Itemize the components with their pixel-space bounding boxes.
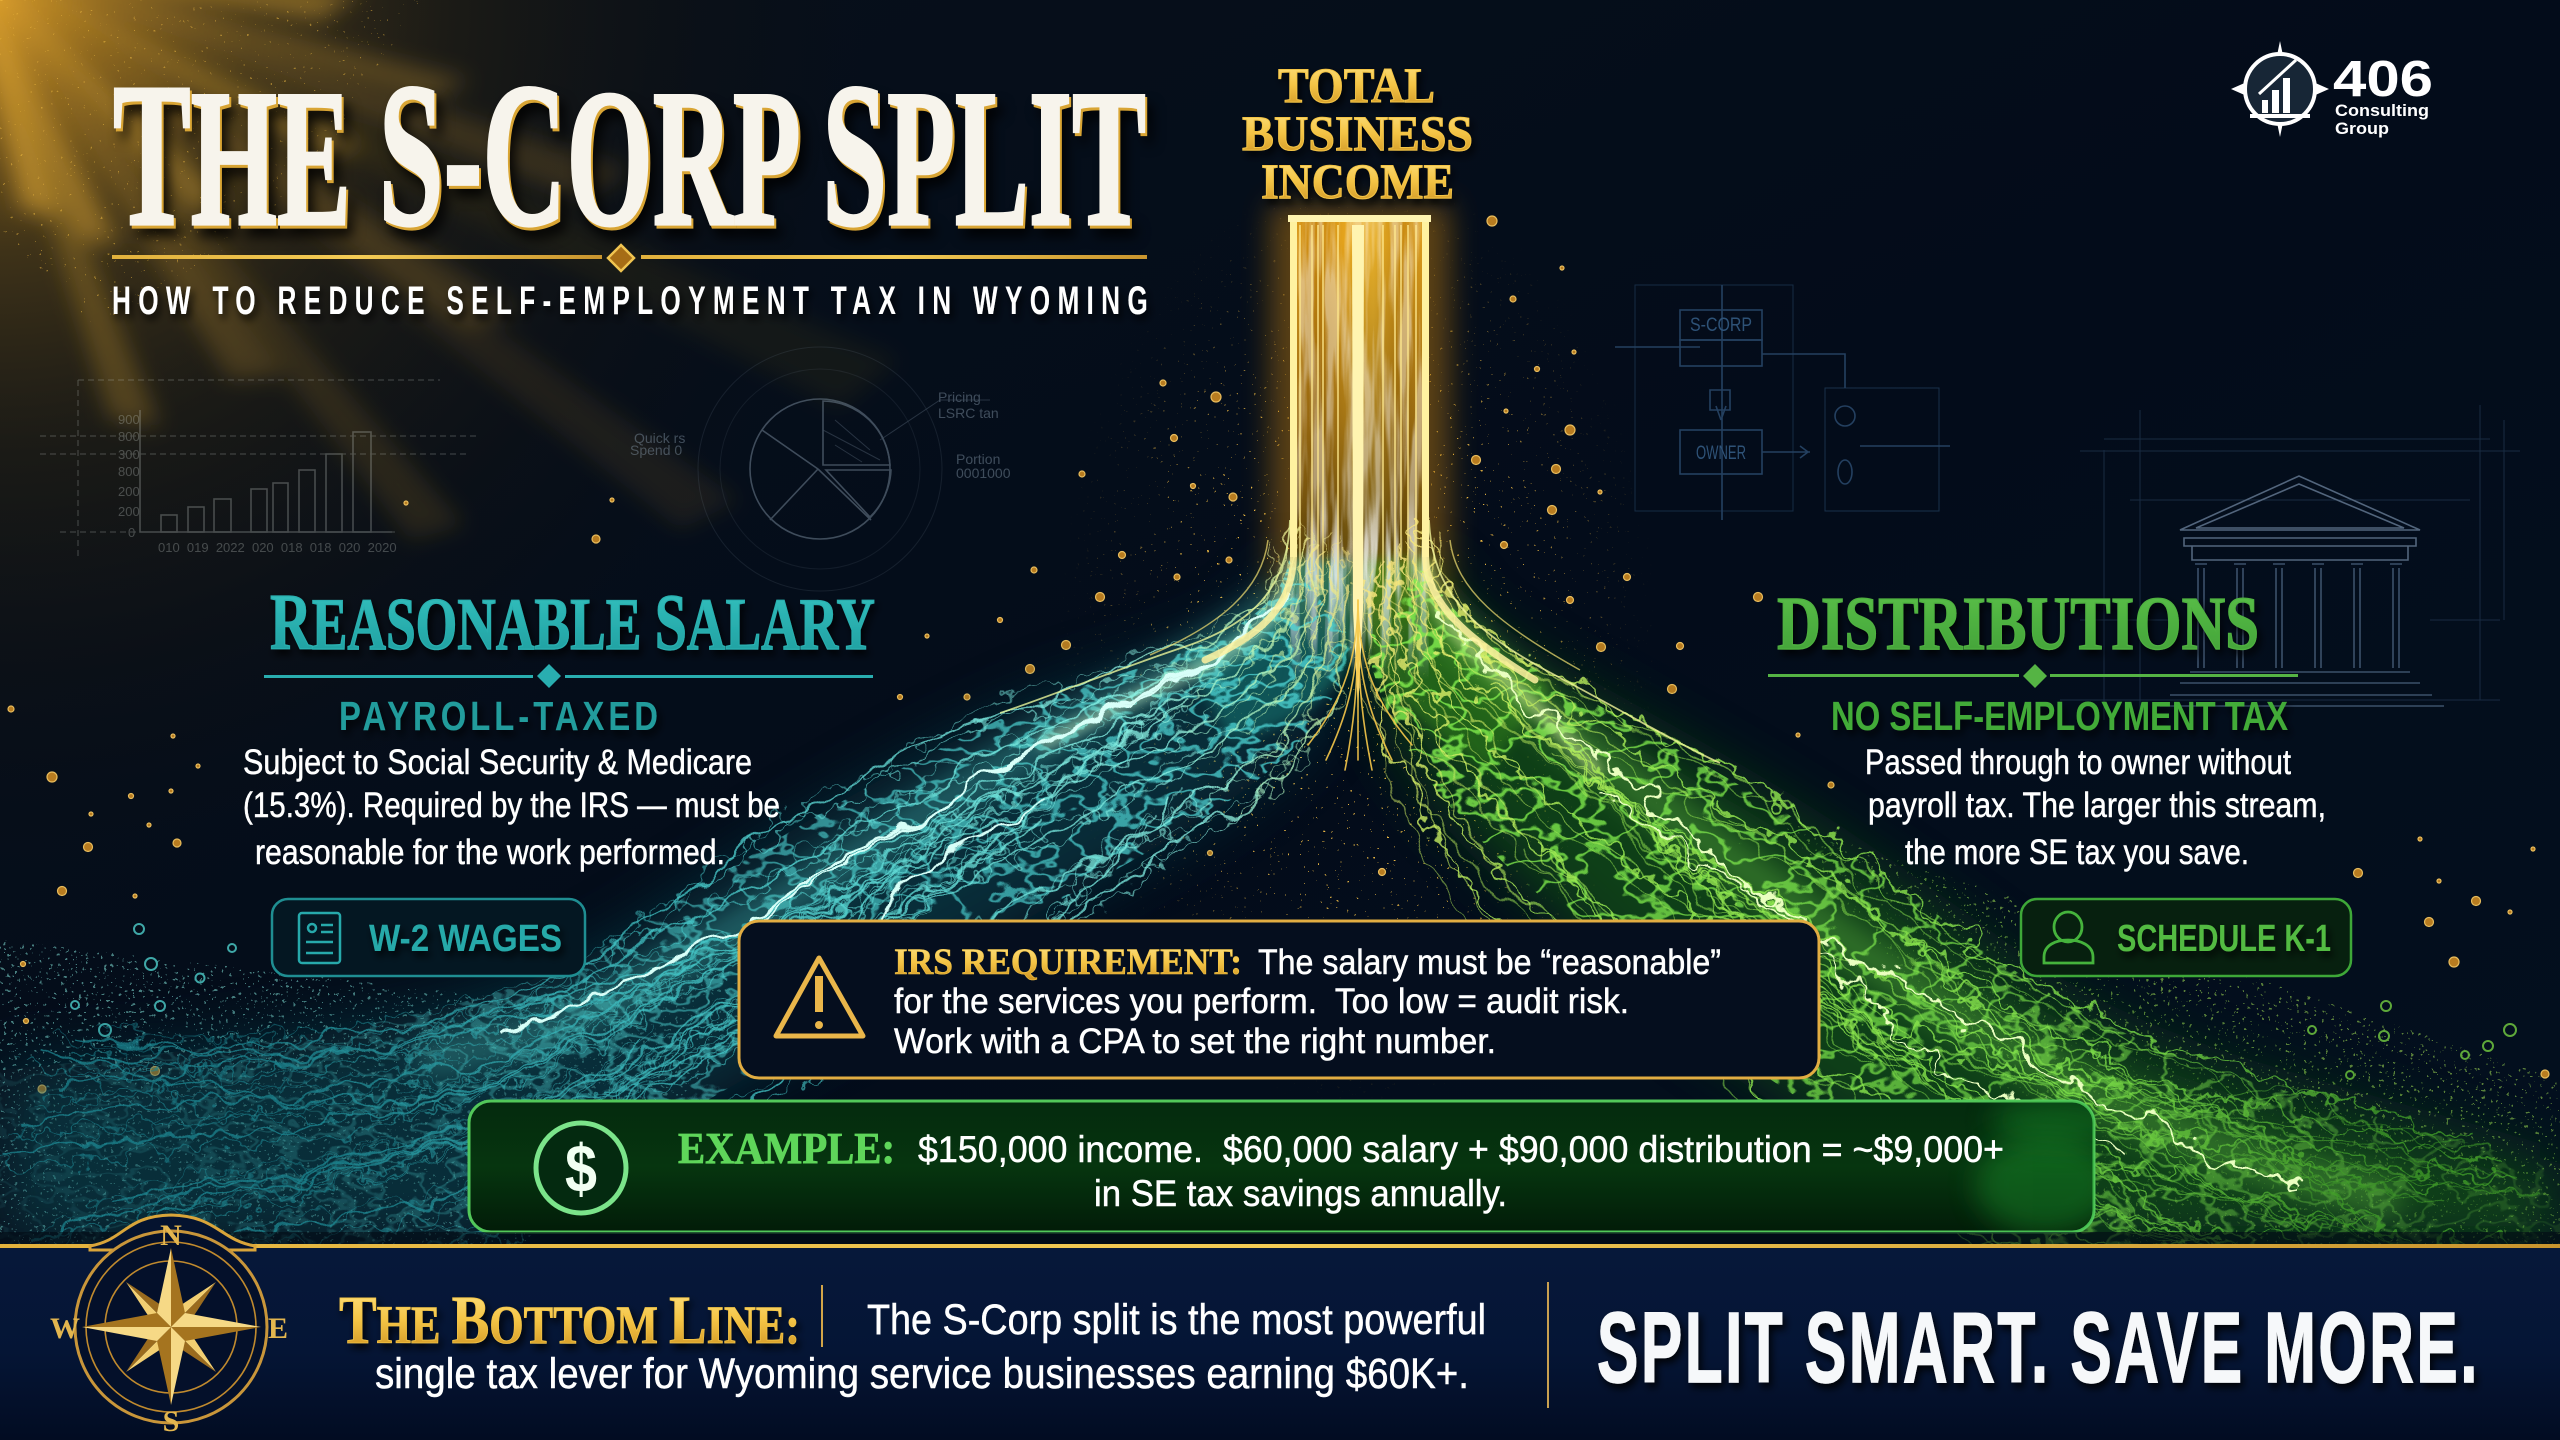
heading: total business income: INCOME (1261, 153, 1454, 209)
example text: $150,000 income. $60,000 salary + $90,000 distribution = ~$9,000+ (918, 1129, 2004, 1170)
divider (821, 1285, 823, 1347)
heading: distributions: DISTRIBUTIONS (1777, 582, 2259, 666)
badge: schedule k-1: SCHEDULE K-1 (2117, 918, 2331, 960)
callout text: for the services you perform. Too low = audit risk. (894, 982, 1629, 1021)
icon: compass rose: N (160, 1219, 182, 1252)
logo: 406 Consulting Group (2231, 41, 2433, 138)
example text (678, 1124, 2004, 1214)
icon: dollar coin: $ (565, 1131, 597, 1207)
blueprint: pie chart: LSRC tan (938, 405, 999, 421)
blueprint: bank building (2060, 405, 2520, 720)
blueprint: pie chart: Quick rs (634, 430, 685, 446)
logo wordmark: Consulting (2335, 102, 2429, 120)
bottom line text: single tax lever for Wyoming service businesses earning $60K+. (375, 1350, 1469, 1398)
bottom line text: The S-Corp split is the most powerful (867, 1296, 1486, 1344)
blueprint: bar chart: 800 (118, 464, 140, 479)
title: THE S-CORP SPLIT (113, 40, 1146, 269)
subheading: payroll-taxed: PAYROLL-TAXED (339, 693, 662, 739)
icon: document (299, 913, 340, 963)
icon: compass and chart (2231, 41, 2329, 137)
callout text: Work with a CPA to set the right number. (894, 1022, 1496, 1061)
income column (1184, 205, 1551, 770)
description: the more SE tax you save. (1905, 833, 2249, 872)
divider (1768, 664, 2298, 688)
logo wordmark: 406 (2333, 50, 2433, 107)
heading: total business income (1242, 57, 1473, 209)
blueprint: s-corp diagram: OWNER (1696, 443, 1746, 464)
panel: reasonable salary (243, 579, 875, 976)
icon: compass rose: S (163, 1405, 179, 1438)
icon: dollar coin (536, 1123, 626, 1213)
blueprint: pie chart: 0001000 (956, 465, 1011, 481)
description: reasonable for the work performed. (255, 833, 725, 872)
column highlights and gold fan (1205, 215, 1535, 770)
icon: person (2044, 912, 2093, 963)
gold particles cloud (0, 170, 2560, 1246)
heading: reasonable salary: REASONABLE SALARY (270, 579, 875, 667)
callout: irs requirement (739, 921, 1819, 1078)
heading: the bottom line: THE BOTTOM LINE: (339, 1282, 800, 1358)
divider (1547, 1282, 1549, 1408)
icon: compass rose: E (268, 1312, 288, 1345)
example text: EXAMPLE: (678, 1124, 895, 1173)
blueprint: bar chart: 0 (128, 525, 135, 540)
badge: schedule k-1 (2021, 899, 2351, 976)
badge: w-2 wages: W-2 WAGES (369, 918, 562, 960)
golden light rays (0, 0, 1150, 900)
blueprint: bar chart: 010 019 2022 020 018 018 020 2020 (158, 540, 397, 555)
panel: distributions (1768, 582, 2351, 976)
description: Subject to Social Security & Medicare (243, 743, 752, 782)
badge: w-2 wages (272, 899, 585, 976)
footer band (0, 1232, 2560, 1440)
description (1865, 743, 2326, 872)
blueprint: pie chart: Portion (956, 451, 1000, 467)
subtitle: HOW TO REDUCE SELF-EMPLOYMENT TAX IN WYOMING (112, 279, 1155, 323)
blueprint: pie chart: Spend 0 (630, 442, 682, 458)
callout text: The salary must be “reasonable” (1258, 943, 1721, 982)
icon: compass rose (50, 1215, 288, 1438)
icon: compass rose: W (50, 1312, 80, 1345)
bottom line text (375, 1296, 1486, 1398)
blueprint: s-corp diagram (1615, 285, 1950, 520)
title divider (112, 245, 1147, 271)
description: (15.3%). Required by the IRS — must be (243, 786, 780, 825)
blueprint: pie chart (630, 347, 1011, 591)
callout: example (469, 1096, 2130, 1235)
blueprint: s-corp diagram: S-CORP (1690, 315, 1752, 336)
callout text (894, 942, 1721, 1061)
blueprint: bar chart (40, 380, 480, 560)
description (243, 743, 780, 872)
blueprint: bar chart: 300 (118, 447, 140, 462)
blueprint: pie chart: Pricing (938, 389, 981, 405)
description: payroll tax. The larger this stream, (1868, 786, 2326, 825)
flow: teal reasonable salary stream (0, 508, 1358, 1262)
logo wordmark (2333, 50, 2433, 138)
subheading: no self-employment tax: NO SELF-EMPLOYMENT TAX (1831, 693, 2288, 739)
blueprint: bar chart: 900 (118, 412, 140, 427)
description: Passed through to owner without (1865, 743, 2291, 782)
example text: in SE tax savings annually. (1094, 1173, 1507, 1214)
heading: total business income: TOTAL (1278, 57, 1435, 113)
blueprint: bar chart: 200 (118, 504, 140, 519)
blueprint: bar chart: 800 (118, 429, 140, 444)
logo wordmark: Group (2335, 120, 2389, 138)
callout text: IRS REQUIREMENT: (894, 942, 1242, 983)
icon: warning triangle (776, 958, 863, 1036)
flow: green distributions stream (1358, 520, 2560, 1260)
blueprint: bar chart: 200 (118, 484, 140, 499)
heading: total business income: BUSINESS (1242, 105, 1473, 161)
divider (264, 664, 873, 688)
